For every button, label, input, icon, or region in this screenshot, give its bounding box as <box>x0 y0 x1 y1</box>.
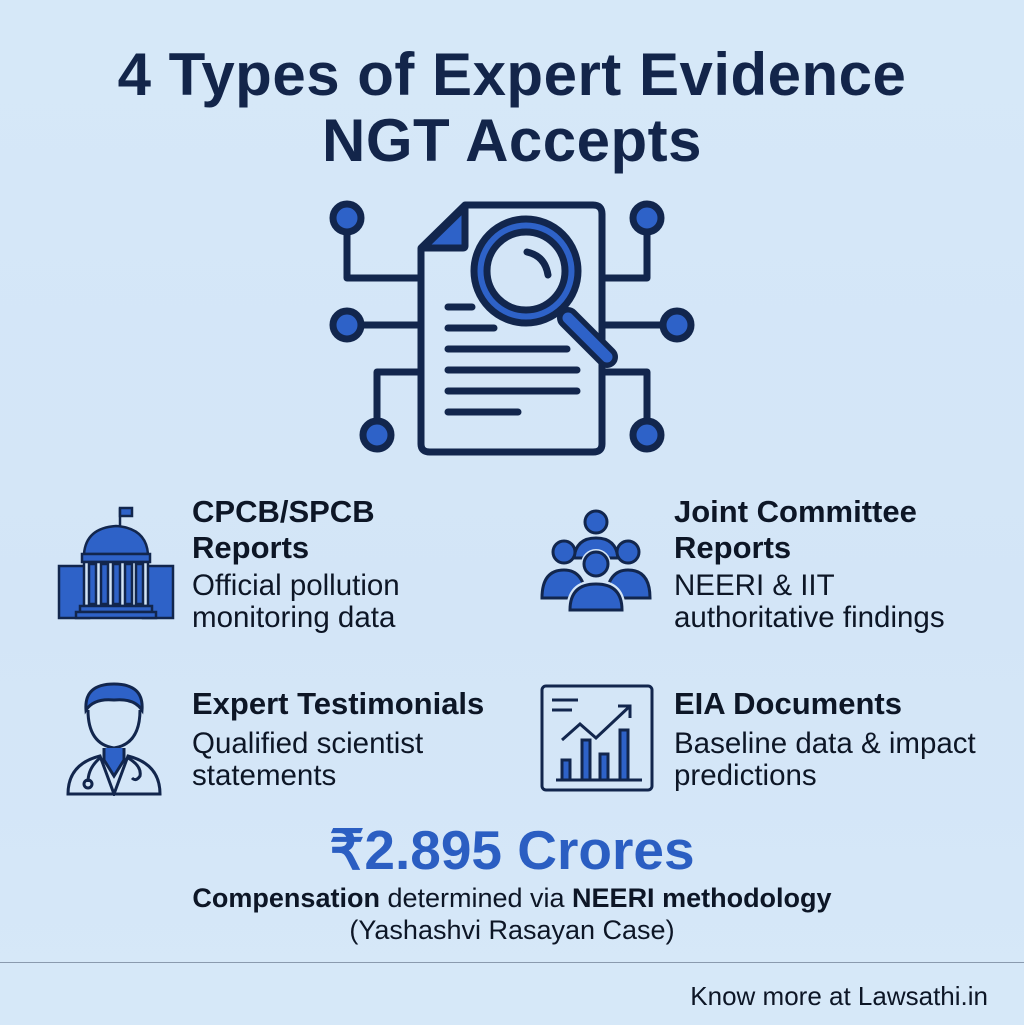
text: NEERI & IIT <box>674 569 835 602</box>
panel: CPCB/SPCB <box>58 494 400 634</box>
icon: document with magnifier network <box>330 200 694 456</box>
text <box>192 569 400 634</box>
title: NGT Accepts <box>322 107 702 174</box>
heading: Expert Testimonials <box>192 686 484 721</box>
text: statements <box>192 759 336 792</box>
heading <box>674 494 917 565</box>
footer <box>0 962 1024 1025</box>
text <box>192 727 423 792</box>
heading: Reports <box>674 530 791 565</box>
text: monitoring data <box>192 601 395 634</box>
heading: EIA Documents <box>674 686 902 721</box>
icon: chart board <box>540 684 654 792</box>
text: Official pollution <box>192 569 400 602</box>
icon: government building <box>58 506 174 620</box>
icon: doctor <box>66 682 162 796</box>
heading <box>192 494 375 565</box>
title <box>118 41 906 174</box>
footer text: Know more at Lawsathi.in <box>690 981 988 1011</box>
text: authoritative findings <box>674 601 945 634</box>
text: compensation note <box>192 883 832 945</box>
text: predictions <box>674 759 817 792</box>
text: compensation note: (Yashashvi Rasayan Case) <box>349 915 675 945</box>
stat: compensation amount: ₹2.895 Crores <box>329 819 695 881</box>
panel: Joint Committee <box>540 494 945 634</box>
text <box>674 727 976 792</box>
heading: Reports <box>192 530 309 565</box>
panel: EIA Documents <box>540 684 976 792</box>
title: 4 Types of Expert Evidence <box>118 41 906 108</box>
heading: Joint Committee <box>674 494 917 529</box>
panel: Expert Testimonials <box>66 682 484 796</box>
text <box>674 569 945 634</box>
heading: CPCB/SPCB <box>192 494 375 529</box>
icon: group of people <box>540 510 652 612</box>
text: Qualified scientist <box>192 727 423 760</box>
text: compensation note: Compensation determined via NEERI methodology <box>192 883 832 913</box>
text: Baseline data & impact <box>674 727 976 760</box>
